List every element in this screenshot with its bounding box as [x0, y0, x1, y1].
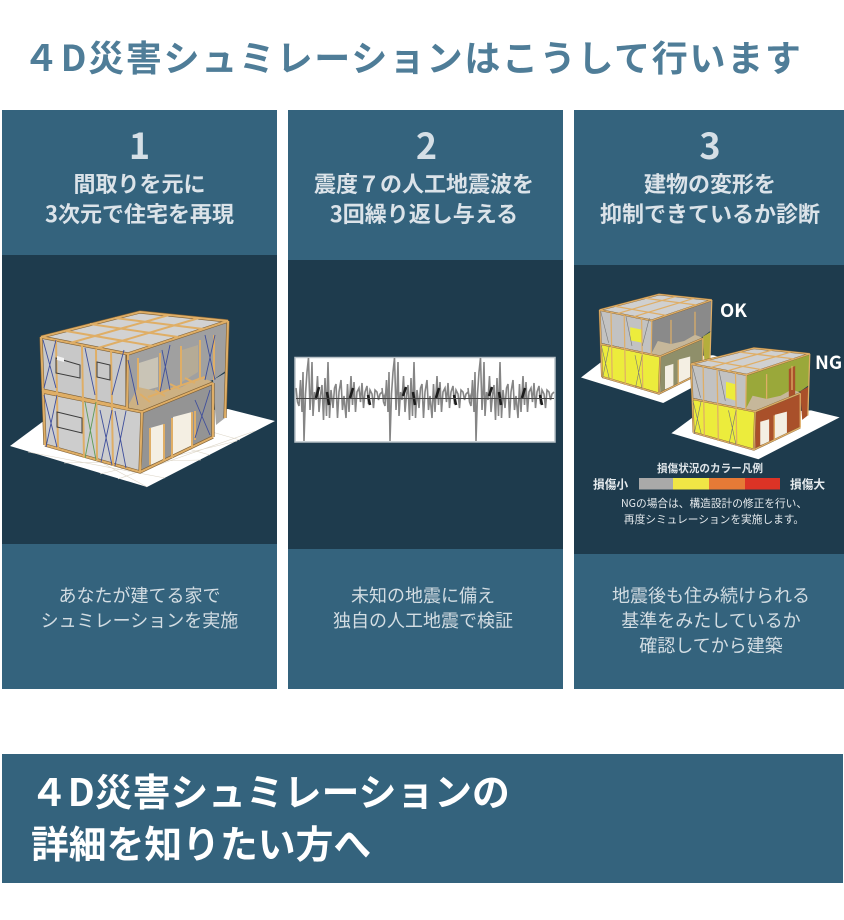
step 1 heading: 間取りを元に	[73, 167, 206, 199]
step 2 heading: 震度７の人工地震波を	[314, 167, 534, 199]
damage colour legend	[593, 461, 825, 527]
panel: step 1	[2, 110, 277, 689]
waveform chart	[295, 358, 555, 442]
step 2 description: 未知の地震に備え	[351, 582, 495, 608]
label OK: OK	[720, 297, 747, 323]
house model: OK	[581, 294, 740, 403]
step 2 heading: 3回繰り返し与える	[330, 196, 518, 228]
step number 3: 3	[699, 118, 721, 170]
step 2 heading	[314, 167, 534, 228]
step 1 heading	[45, 167, 234, 228]
damage colour legend: NGの場合は、構造設計の修正を行い、	[621, 496, 807, 511]
title: ４D災害シュミレーションはこうして行います	[23, 30, 803, 82]
damage colour legend: 損傷状況のカラー凡例	[657, 461, 763, 476]
house model: step 1	[10, 312, 275, 487]
step 3 image area	[574, 265, 844, 554]
step 2 image area	[288, 260, 563, 549]
step 3 description	[612, 582, 810, 658]
step number 2: 2	[416, 118, 437, 170]
banner text: 詳細を知りたい方へ	[31, 814, 371, 869]
label NG: NG	[815, 349, 842, 375]
step 3 heading: 建物の変形を	[644, 167, 776, 199]
step 1 description: シュミレーションを実施	[41, 607, 238, 633]
step 1 description: あなたが建てる家で	[58, 582, 220, 608]
step 3 description: 地震後も住み続けられる	[612, 582, 810, 608]
step 1 heading: 3次元で住宅を再現	[45, 196, 234, 228]
step 2 description: 独自の人工地震で検証	[333, 607, 513, 633]
step 2 description	[333, 582, 513, 633]
step 1 description	[41, 582, 238, 633]
banner	[2, 754, 843, 883]
damage colour legend: 再度シミュレーションを実施します。	[624, 512, 804, 527]
banner text: ４D災害シュミレーションの	[30, 762, 510, 817]
step 3 description: 基準をみたしているか	[621, 607, 801, 633]
step 3 heading	[600, 167, 820, 228]
panel: step 2	[288, 110, 563, 689]
step 3 description: 確認してから建築	[639, 632, 783, 658]
step 1 image area	[2, 255, 277, 544]
damage colour legend: 損傷小	[593, 476, 628, 492]
damage colour legend: 損傷大	[790, 476, 825, 492]
step number 1: 1	[129, 118, 150, 170]
house model: NG	[671, 348, 840, 459]
step 3 heading: 抑制できているか診断	[600, 196, 820, 228]
banner text	[30, 762, 510, 869]
panel: step 3	[574, 110, 844, 689]
